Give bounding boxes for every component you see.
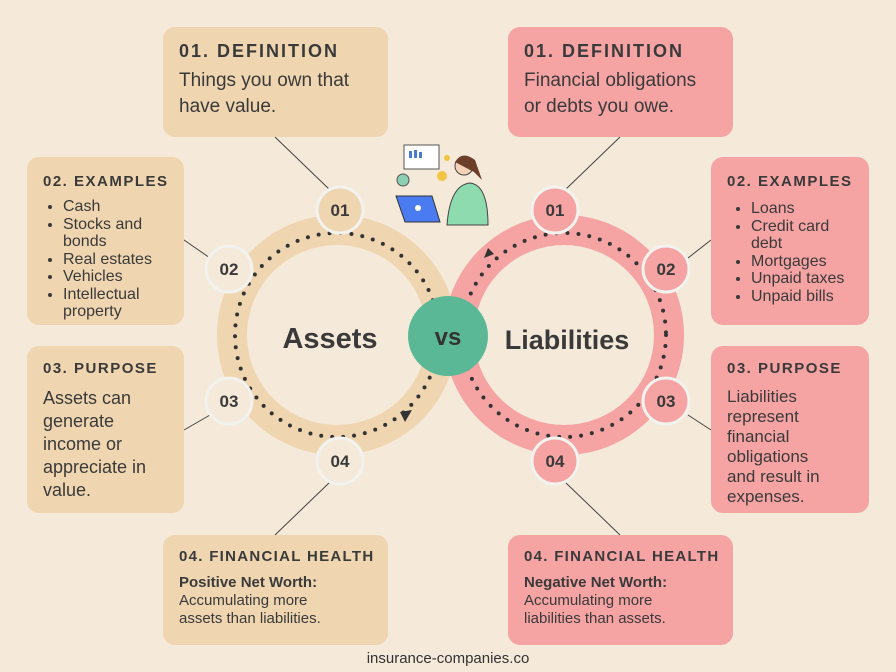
panel: liabilities purpose: represent bbox=[727, 407, 799, 426]
panel: liabilities examples: Loans bbox=[751, 200, 795, 217]
panel: assets financial health: assets than liabilities. bbox=[179, 610, 321, 627]
badges: 01 bbox=[331, 201, 349, 220]
panel: liabilities examples: Unpaid bills bbox=[751, 288, 834, 304]
badges: 02 bbox=[220, 260, 238, 279]
panel: liabilities financial health: Accumulating more bbox=[524, 592, 652, 609]
panel: liabilities purpose: expenses. bbox=[727, 487, 804, 506]
badges: 02 bbox=[657, 260, 675, 279]
panel: assets examples: Vehicles bbox=[63, 268, 123, 285]
panel: assets examples: Intellectual property bbox=[63, 286, 140, 320]
badges: 03 bbox=[220, 392, 238, 411]
title: Assets: Assets bbox=[282, 323, 378, 355]
panel: assets definition: 01. DEFINITION bbox=[179, 41, 339, 61]
vs circle bbox=[408, 296, 488, 376]
badges: 04 bbox=[331, 452, 350, 471]
ring: assets bbox=[232, 230, 442, 440]
panel: liabilities definition: Financial obligations or debts you owe. bbox=[524, 70, 696, 117]
badges: 01 bbox=[546, 201, 564, 220]
panel: assets financial health bbox=[163, 535, 388, 645]
ring: liabilities bbox=[459, 230, 669, 440]
panel: liabilities examples: 02. EXAMPLES bbox=[727, 173, 853, 190]
panel: liabilities financial health: liabilities than assets. bbox=[524, 610, 666, 627]
panel: liabilities examples bbox=[711, 157, 869, 325]
panel: liabilities examples: Unpaid taxes bbox=[751, 270, 844, 287]
illustration: woman with laptop bbox=[396, 145, 488, 225]
panel: liabilities purpose: obligations bbox=[727, 447, 808, 466]
panel: liabilities purpose: financial bbox=[727, 427, 789, 446]
panel: liabilities examples: Mortgages bbox=[751, 252, 827, 270]
panel: assets definition bbox=[163, 27, 388, 137]
panel: liabilities examples: Credit card bbox=[751, 218, 829, 234]
panel: assets examples: Stocks and bonds bbox=[63, 216, 142, 250]
panel: assets purpose bbox=[27, 346, 184, 513]
vs circle: vs bbox=[435, 324, 461, 351]
panel: liabilities examples: debt bbox=[751, 235, 782, 252]
panel: assets examples: 02. EXAMPLES bbox=[43, 173, 169, 190]
panel: liabilities purpose: 03. PURPOSE bbox=[727, 360, 842, 377]
panel: liabilities purpose: Liabilities bbox=[727, 387, 797, 406]
panel: liabilities definition: 01. DEFINITION bbox=[524, 41, 684, 61]
footer: insurance-companies.co bbox=[367, 650, 529, 667]
panel: assets purpose: Assets can generate income or appreciate in value. bbox=[43, 388, 146, 500]
panel: liabilities purpose bbox=[711, 346, 869, 513]
panel: liabilities purpose: and result in bbox=[727, 467, 820, 486]
panel: assets examples: Real estates bbox=[63, 250, 152, 268]
badges: 03 bbox=[657, 392, 675, 411]
panel: liabilities definition bbox=[508, 27, 733, 137]
panel: assets purpose: 03. PURPOSE bbox=[43, 360, 158, 377]
badges: 04 bbox=[546, 452, 565, 471]
title: Liabilities: Liabilities bbox=[505, 325, 629, 355]
panel: assets definition: Things you own that have value. bbox=[179, 70, 349, 117]
panel: liabilities financial health: 04. FINANCIAL HEALTH bbox=[524, 548, 719, 565]
panel: assets financial health: 04. FINANCIAL HEALTH bbox=[179, 548, 374, 565]
panel: assets examples: Cash bbox=[63, 198, 100, 215]
panel: assets financial health: Accumulating more bbox=[179, 592, 307, 609]
badges bbox=[206, 187, 689, 484]
panel: assets financial health: Positive Net Worth: bbox=[179, 574, 317, 591]
panel: liabilities financial health: Negative Net Worth: bbox=[524, 574, 667, 591]
panel: assets examples bbox=[27, 157, 184, 325]
panel: liabilities financial health bbox=[508, 535, 733, 645]
